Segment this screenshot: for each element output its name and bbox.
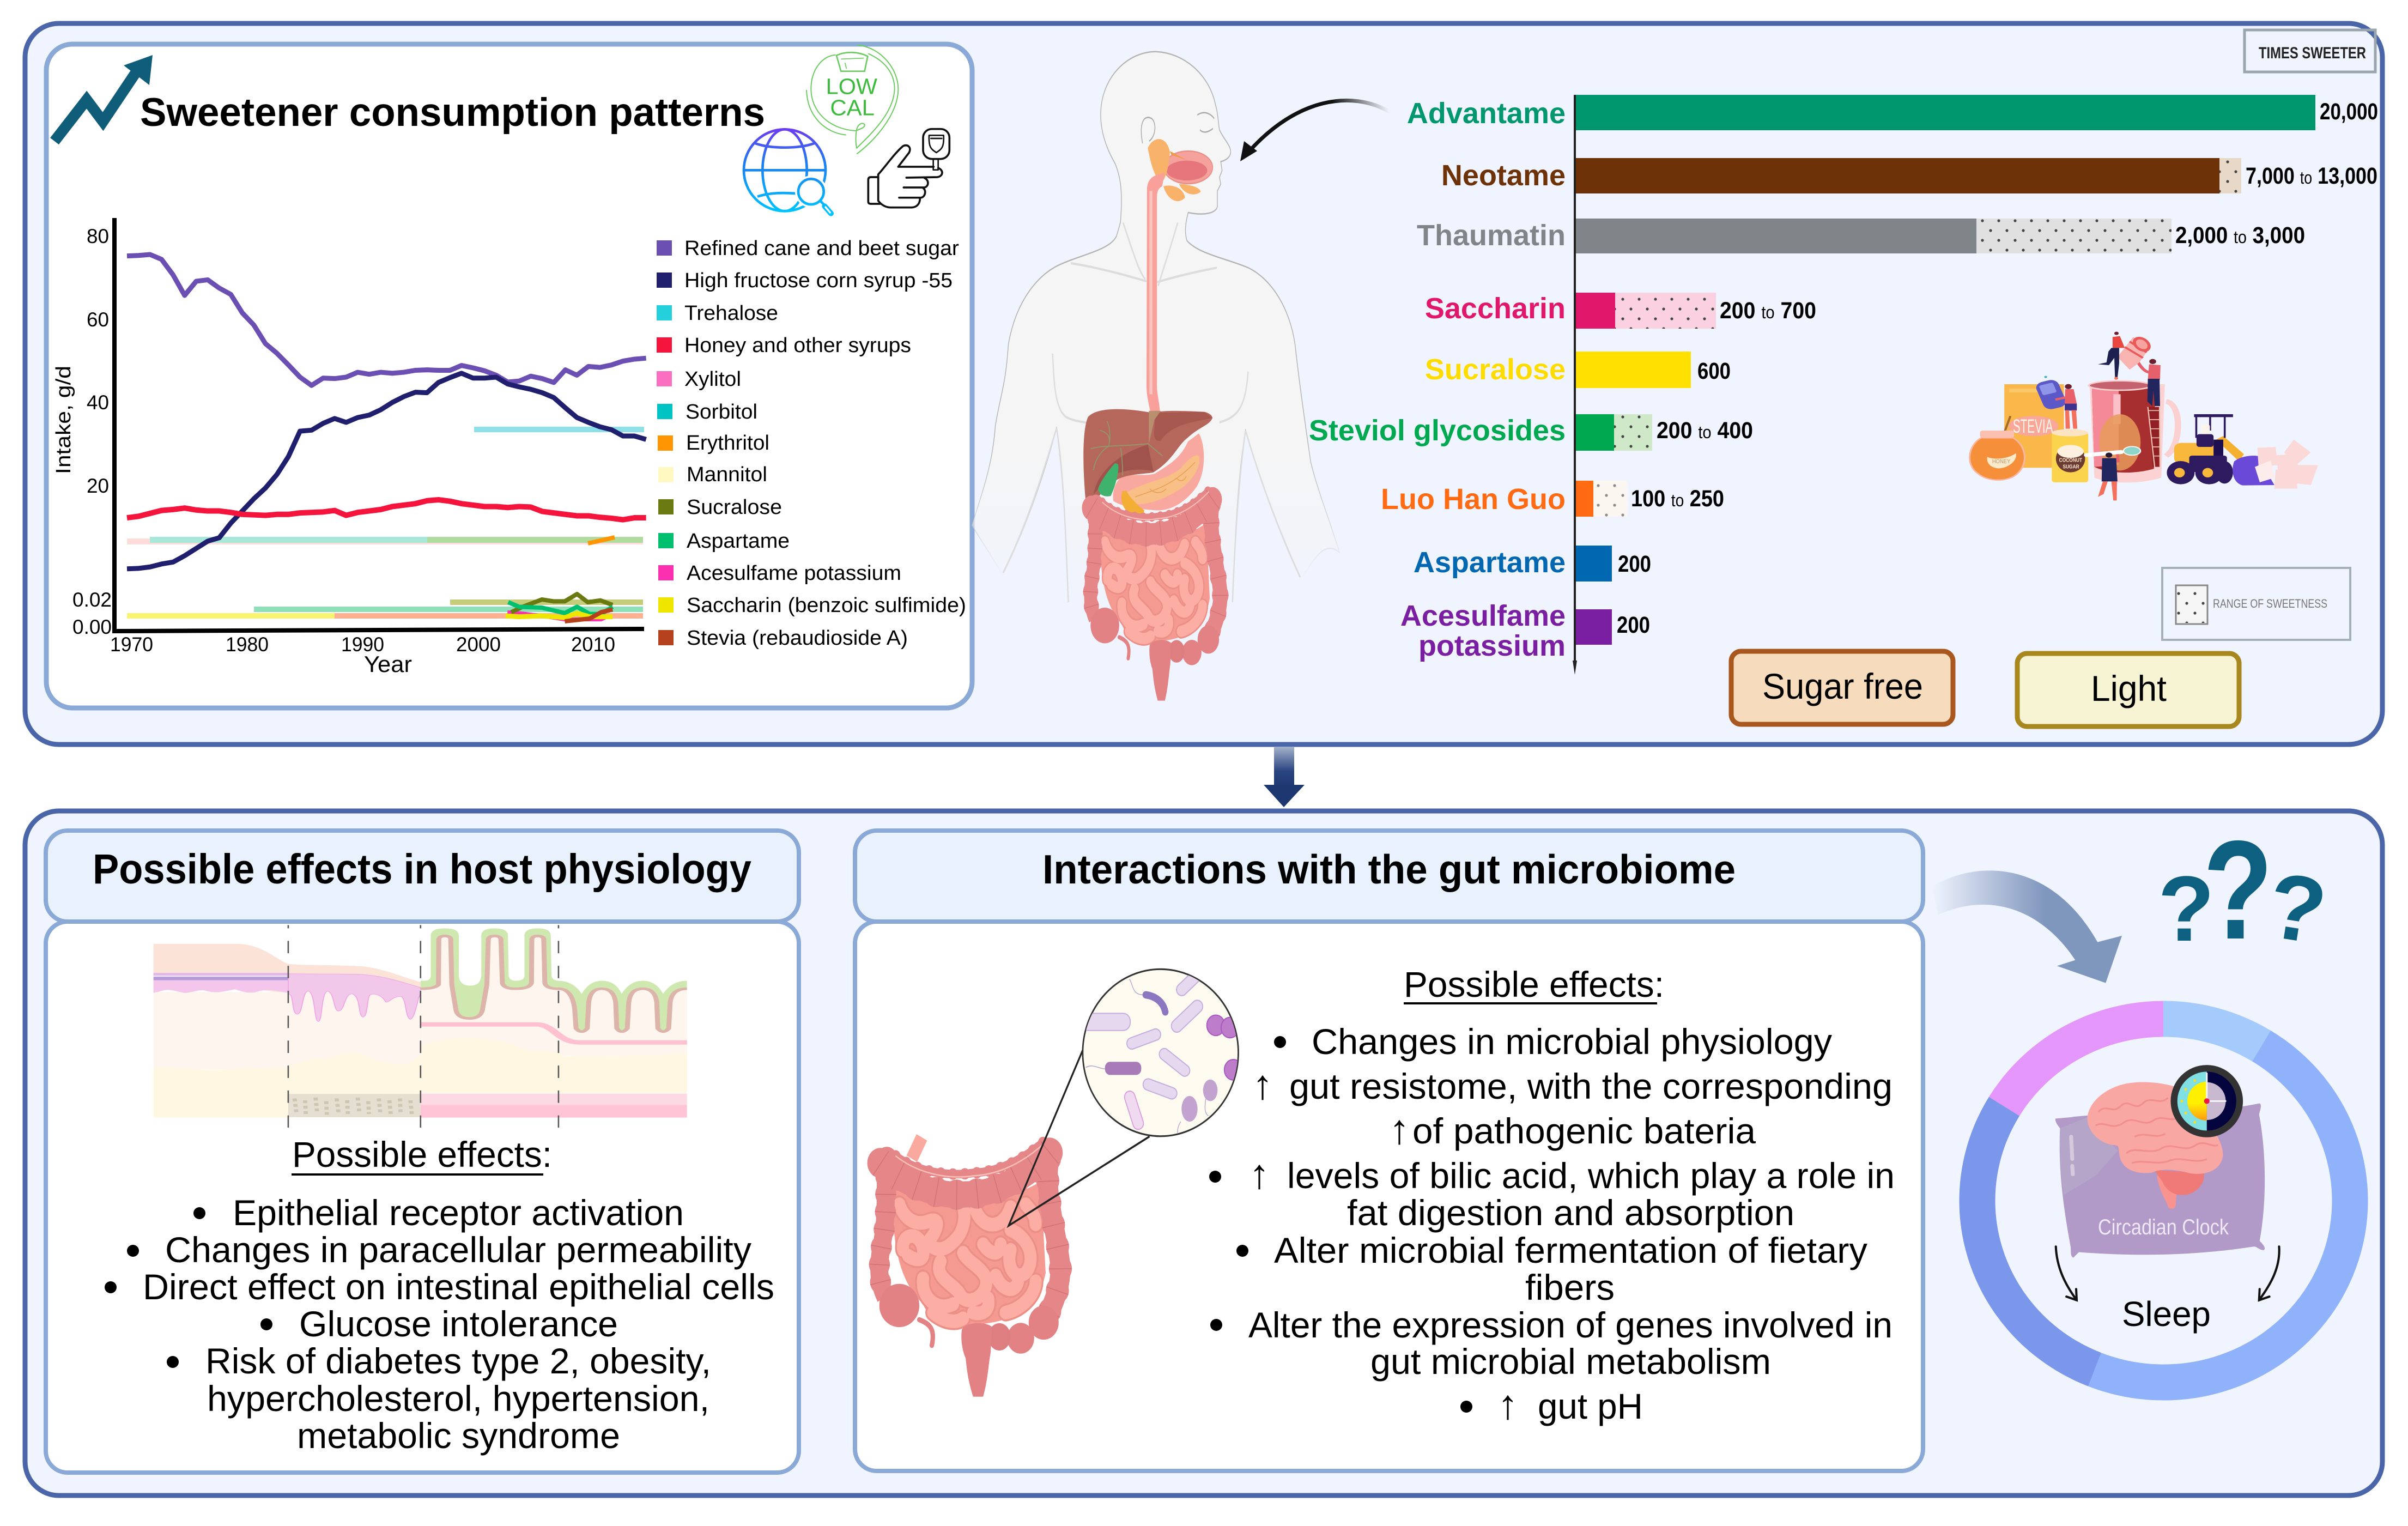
bullet list: microbiome effects: Alter the expression of genes involved in — [1248, 1305, 1893, 1345]
panel: possible effects in host physiology — [46, 831, 799, 1473]
range bands — [127, 427, 644, 619]
panel: interactions with the gut microbiome — [855, 831, 1923, 1471]
chart legend: Honey and other syrups — [684, 334, 911, 357]
bar chart axis — [1573, 95, 1577, 675]
bullet list: microbiome effects: levels of bilic acid, which play a role in — [1287, 1155, 1895, 1196]
bar: luo han guo: Luo Han Guo — [1381, 483, 1566, 516]
line: refined cane and beet sugar — [127, 255, 646, 385]
body silhouette — [972, 52, 1339, 607]
button: sugar free: Sugar free — [1762, 666, 1923, 706]
x axis tick labels: 2000 — [456, 633, 501, 656]
legend box: times sweeter — [2245, 30, 2375, 72]
coconut sugar can — [2052, 429, 2088, 482]
bar: acesulfame potassium: Acesulfame — [1400, 600, 1566, 632]
bullet list: microbiome effects: gut microbial metabolism — [1370, 1341, 1771, 1382]
large mug — [2089, 381, 2178, 482]
bullet list: microbiome effects: fibers — [1525, 1267, 1615, 1307]
top panel background — [25, 23, 2382, 744]
y axis tick labels: 20 — [87, 475, 109, 497]
bullet list: host effects: Risk of diabetes type 2, obesity, — [205, 1341, 711, 1381]
bar: luo han guo: 100 to 250 — [1631, 486, 1724, 512]
y axis tick labels — [72, 225, 112, 638]
lines: low-intensity sweeteners — [506, 594, 612, 621]
sugar package — [2118, 334, 2155, 370]
bullet list: microbiome effects: of pathogenic bateria — [1412, 1111, 1756, 1151]
y axis label: Intake, g/d — [52, 366, 75, 474]
bar: thaumatin: 2,000 to 3,000 — [2175, 222, 2305, 249]
illustration: sweetener products with tiny people — [1970, 332, 2318, 500]
arrow: curved toward circadian clock — [1931, 870, 2122, 983]
bullet list: host effects: Epithelial receptor activation — [233, 1192, 684, 1233]
bar: steviol glycosides: 200 to 400 — [1657, 417, 1753, 444]
x axis label: Year — [364, 651, 412, 677]
chart legend: Saccharin (benzoic sulfimide) — [687, 594, 966, 617]
spoon and person below — [2086, 446, 2140, 500]
chart legend: Refined cane and beet sugar — [684, 237, 959, 260]
line: high fructose corn syrup — [127, 373, 646, 569]
person with meter — [2055, 384, 2077, 429]
chart: sweetener intake over time — [52, 218, 646, 677]
chart legend: High fructose corn syrup -55 — [684, 269, 953, 292]
bar: acesulfame potassium: potassium — [1418, 629, 1566, 662]
bullet list: microbiome effects: ↑ — [1389, 1106, 1410, 1153]
bar: saccharin — [1425, 292, 1816, 329]
chart legend: Xylitol — [684, 368, 741, 391]
icon: low cal badge — [806, 45, 898, 154]
bar: saccharin: Saccharin — [1425, 292, 1566, 325]
y axis tick labels: 40 — [87, 391, 109, 414]
ear and face — [1141, 113, 1214, 143]
bar: acesulfame potassium: 200 — [1617, 612, 1650, 638]
bar: aspartame — [1414, 546, 1651, 582]
bullet list: microbiome effects: gut resistome, with the corresponding — [1289, 1066, 1893, 1106]
bar: acesulfame potassium — [1400, 600, 1650, 662]
chart legend: Sucralose — [687, 496, 782, 519]
bar: thaumatin: Thaumatin — [1417, 219, 1566, 252]
bar: steviol glycosides: Steviol glycosides — [1309, 414, 1566, 447]
illustration: intestinal wall sections — [154, 925, 687, 1128]
mouth cavity — [1164, 151, 1212, 184]
y axis tick labels: 80 — [87, 225, 109, 247]
heading box: gut microbiome: Interactions with the gut microbiome — [1042, 846, 1736, 892]
heading box: host physiology: Possible effects in host physiology — [93, 846, 751, 893]
pillow — [2055, 1103, 2265, 1258]
bar chart: relative sweetness — [1309, 95, 2378, 675]
esophagus — [1147, 173, 1164, 413]
bullet list: microbiome effects: fat digestion and absorption — [1347, 1192, 1794, 1233]
bullet list: microbiome effects: ↑ — [1497, 1382, 1518, 1428]
bullet list: microbiome effects: gut pH — [1538, 1386, 1643, 1426]
heading box: host physiology — [46, 831, 799, 922]
illustration: human digestive system — [972, 52, 1339, 701]
body and upper digestive tract — [972, 52, 1339, 607]
bar: sucralose — [1425, 352, 1731, 388]
intestines — [1090, 489, 1220, 701]
bar: sucralose: Sucralose — [1425, 353, 1566, 386]
icon: question marks: ? — [2158, 857, 2215, 961]
stevia bag — [2004, 384, 2064, 468]
clock icon — [2170, 1065, 2243, 1137]
coconut sugar can: COCONUT — [2059, 457, 2083, 463]
bar: steviol glycosides — [1309, 414, 1753, 451]
label: sleep: Sleep — [2122, 1294, 2211, 1334]
bar: aspartame: 200 — [1618, 551, 1651, 577]
bottom panel background — [25, 811, 2382, 1495]
bullet list: microbiome effects: Changes in microbial physiology — [1312, 1021, 1832, 1062]
sugar cubes — [2255, 440, 2318, 489]
subheading: possible effects: Possible effects: — [1404, 964, 1664, 1004]
chart legend: Trehalose — [684, 302, 778, 325]
icon: rising trend arrow — [54, 55, 153, 141]
legend box: range of sweetness: RANGE OF SWEETNESS — [2213, 597, 2327, 610]
bullet list: host effects: metabolic syndrome — [297, 1415, 620, 1456]
x axis tick labels — [110, 633, 615, 656]
person on top — [2098, 332, 2125, 380]
bar: luo han guo — [1381, 481, 1724, 517]
bullet list: host effects: Changes in paracellular permeability — [165, 1230, 751, 1270]
axes — [114, 218, 644, 631]
bullet list: microbiome effects: ↑ — [1249, 1151, 1270, 1197]
chart legend: Sorbitol — [686, 401, 757, 423]
icon: globe with magnifier — [744, 129, 831, 214]
person on ladder — [2138, 359, 2161, 406]
legend box: times sweeter: TIMES SWEETER — [2259, 44, 2366, 62]
bulldozer — [2167, 414, 2274, 486]
chart legend: Stevia (rebaudioside A) — [687, 627, 908, 650]
line: erythritol — [588, 537, 615, 543]
brain — [2087, 1082, 2223, 1209]
bullet list: microbiome effects: Alter microbial fermentation of fietary — [1274, 1230, 1867, 1270]
icon: low cal badge: LOW — [826, 74, 878, 99]
diagram: circadian ring with brain on pillow — [1977, 1019, 2350, 1382]
bar: advantame: 20,000 — [2320, 99, 2378, 125]
honey jar: HONEY — [1992, 458, 2010, 465]
x axis tick labels: 1970 — [110, 633, 153, 656]
content box — [855, 922, 1923, 1471]
y axis tick labels: 0.00 — [72, 616, 112, 638]
bullet list: host effects: Direct effect on intestinal epithelial cells — [143, 1267, 774, 1307]
illustration: intestines with gut stub — [880, 1137, 1060, 1397]
y axis tick labels: 0.02 — [72, 589, 112, 611]
bar: neotame — [1441, 158, 2377, 193]
bullet list: host effects: Glucose intolerance — [299, 1304, 618, 1344]
x axis tick labels: 1990 — [341, 633, 384, 656]
bar: advantame: Advantame — [1407, 97, 1566, 130]
liver stomach pancreas gallbladder — [1083, 409, 1212, 514]
chart legend: Aspartame — [687, 530, 790, 553]
content box — [46, 922, 799, 1473]
title: sweetener consumption patterns: Sweetener consumption patterns — [140, 90, 765, 135]
bullet list: host effects: hypercholesterol, hypertension, — [207, 1378, 709, 1419]
bullet list: microbiome effects: ↑ — [1252, 1062, 1273, 1108]
pillow label: Circadian Clock — [2098, 1215, 2229, 1239]
heading box: gut microbiome — [855, 831, 1923, 922]
line: honey and other syrups — [127, 500, 646, 520]
arrow: down between panels — [1264, 747, 1305, 807]
arrows to sleep — [2056, 1246, 2279, 1300]
chart legend: Acesulfame potassium — [687, 562, 901, 585]
arrow: sweetener into mouth — [1240, 100, 1390, 161]
salivary glands — [1148, 139, 1200, 201]
illustration: magnified gut bacteria — [1009, 969, 1242, 1226]
icon: question marks: ? — [2261, 853, 2333, 964]
button: light — [2017, 653, 2239, 726]
bullet list: host effects — [105, 1192, 774, 1456]
icon: question marks — [2158, 811, 2333, 968]
legend box: range of sweetness — [2162, 568, 2350, 640]
ladder — [2148, 407, 2160, 467]
bullet list: microbiome effects — [1209, 1021, 1895, 1428]
stevia bag: STEVIA — [2013, 416, 2053, 437]
bar: advantame — [1407, 95, 2378, 130]
bar: neotame: 7,000 to 13,000 — [2246, 163, 2377, 189]
icon: low cal badge: CAL — [830, 95, 875, 120]
button: sugar free — [1731, 651, 1953, 724]
subheading: possible effects: Possible effects: — [292, 1134, 552, 1174]
ring segments — [1977, 1019, 2350, 1382]
bar: aspartame: Aspartame — [1414, 546, 1566, 579]
chart legend: Mannitol — [687, 463, 767, 486]
button: light: Light — [2091, 668, 2167, 708]
body shading lines — [1003, 222, 1300, 602]
icon: question marks: ? — [2203, 811, 2273, 968]
honey jar — [1970, 416, 2024, 480]
bar: thaumatin — [1417, 219, 2305, 253]
bar: saccharin: 200 to 700 — [1720, 298, 1816, 324]
glucose meter — [2034, 376, 2068, 411]
x axis tick labels: 1980 — [226, 633, 269, 656]
y axis tick labels: 60 — [87, 308, 109, 331]
coconut sugar can: SUGAR — [2063, 463, 2079, 470]
x axis tick labels: 2010 — [571, 633, 615, 656]
panel: sweetener consumption patterns — [46, 44, 972, 708]
icon: finger on glucose meter — [868, 129, 949, 208]
bar: sucralose: 600 — [1697, 358, 1731, 384]
chart legend — [657, 237, 966, 650]
chart legend: Erythritol — [686, 432, 769, 455]
bar: neotame: Neotame — [1441, 159, 1566, 192]
